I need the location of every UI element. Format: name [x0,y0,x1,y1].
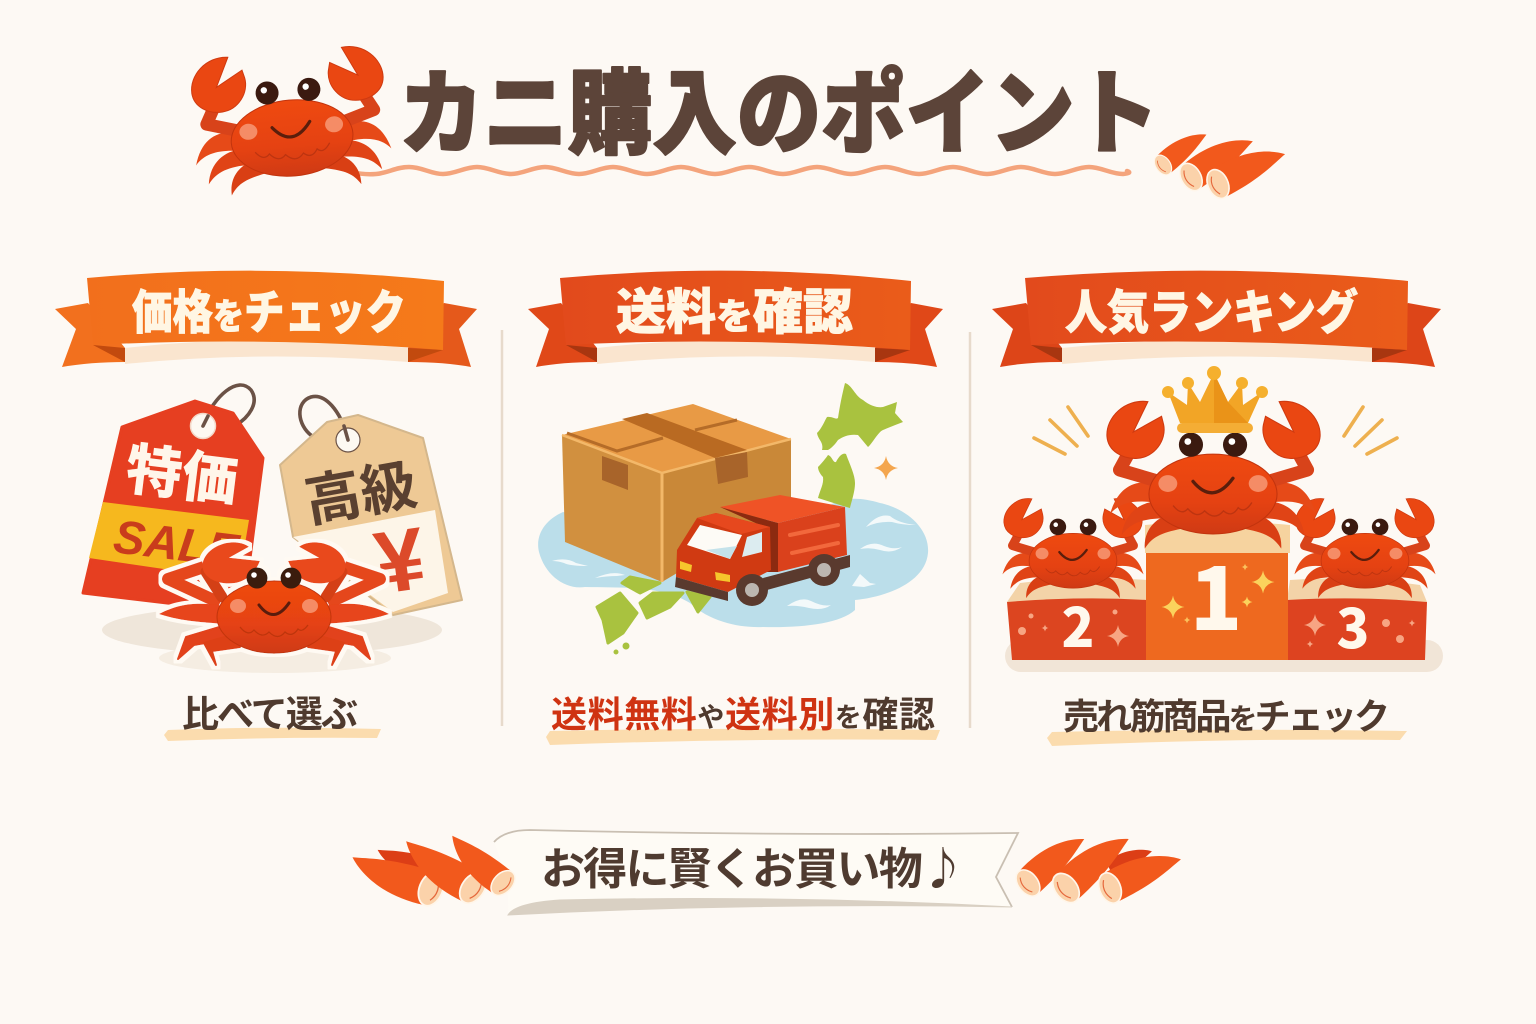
tag: kraft premium [280,415,462,615]
caption: shipping: 送料無料や送料別を確認 [551,686,935,738]
podium: first place [1145,522,1290,660]
panel: ranking [992,271,1443,746]
icon: crab legs top right [1150,124,1291,202]
podium: second place: 2 [1062,584,1094,663]
tag: kraft premium: 高級 [298,440,422,539]
caption: ranking: 売れ筋商品をチェック [1063,688,1390,740]
podium: first place: 1 [1190,530,1242,655]
icon: delivery truck [675,495,850,606]
closing ribbon [494,830,1018,915]
water [538,499,928,627]
map: western Japan [597,577,710,653]
podium: second place [1007,578,1152,663]
footer [345,824,1187,915]
panel: shipping [528,271,943,745]
tag: red sale: 特価 [122,424,243,519]
icon: crown [1162,366,1268,433]
icon: first place crab [1107,401,1320,549]
tag: red sale: SALE [111,509,243,577]
illustration: podium with crabs [1002,366,1443,672]
divider right [969,332,971,728]
title text: カニ購入のポイント [399,40,1159,173]
ribbon: price check [55,271,477,367]
divider left [501,330,503,726]
tag shadow [102,605,442,655]
icon: header crab [187,43,394,198]
podium shadow [1005,640,1443,672]
rays left [1034,407,1088,454]
icon: second place crab [1002,499,1144,598]
crab legs left [345,825,520,912]
illustration: box, truck, Japan map [538,383,928,653]
ribbon: shipping: 送料を確認 [616,273,853,344]
rays right [1344,407,1397,454]
title wave underline [352,167,1129,174]
ribbon: shipping [528,271,943,367]
map: Hokkaido [817,383,903,450]
ribbon: ranking: 人気ランキング [1065,274,1358,343]
map: Honshu north [818,454,855,508]
illustration: price tags with crab [83,385,462,673]
icon: sparkle [874,456,898,480]
podium: third place [1286,578,1427,664]
crab legs right [1010,824,1187,908]
tag: red sale [83,401,263,612]
title group [187,40,1291,202]
string: kraft tag [300,396,348,438]
icon: cardboard box [562,404,791,582]
caption: price: 比べて選ぶ [182,684,358,738]
string: sale tag [203,385,254,425]
ribbon: ranking [992,271,1441,367]
panel: price check [55,271,477,741]
icon: crab with halo [159,542,389,665]
icon: third place crab [1294,499,1436,598]
closing ribbon: お得に賢くお買い物♪ [541,833,965,897]
ribbon: price check: 価格をチェック [132,274,406,343]
podium: third place: 3 [1337,585,1369,664]
tag: kraft premium: ¥ [369,508,431,613]
